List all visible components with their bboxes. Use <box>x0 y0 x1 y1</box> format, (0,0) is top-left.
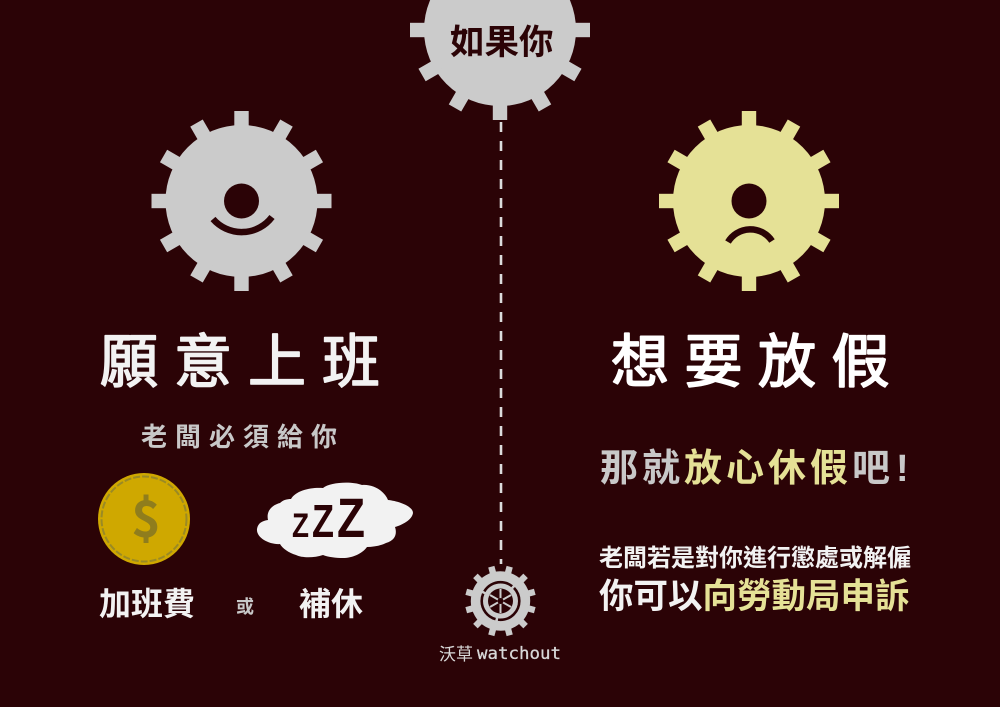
text: 那就放心休假吧: 那就放心休假吧 <box>600 448 894 490</box>
icon: sleeping cloud <box>257 483 413 558</box>
logo: watchout gear <box>458 558 543 644</box>
logo text: 沃草 watchout: 沃草 <box>439 645 473 664</box>
icon: sleeping cloud: Z <box>337 486 365 549</box>
heading: 想要放假: 想要放假 <box>611 330 905 395</box>
icon: sleeping cloud: Z <box>312 495 334 547</box>
top gear: 如果你: 如果你 <box>450 24 554 62</box>
subheading: 老闆必須給你: 老闆必須給你 <box>141 422 345 452</box>
icon: sad gear <box>659 111 839 291</box>
icon: gold coin: $ <box>131 480 161 552</box>
dashed connector line <box>500 122 502 564</box>
icon: gold coin <box>98 473 190 565</box>
icon: sleeping cloud: Z <box>292 507 309 545</box>
text: 老闆若是對你進行懲處或解僱: 老闆若是對你進行懲處或解僱 <box>599 545 911 572</box>
text: watchout <box>477 644 561 664</box>
label: 補休: 補休 <box>299 586 363 622</box>
top gear: 如果你 <box>410 0 590 120</box>
heading: 願意上班: 願意上班 <box>100 330 396 395</box>
icon: smiling gear <box>152 111 332 291</box>
text: 那就放心休假吧: ! <box>896 448 913 490</box>
label: 加班費: 加班費 <box>99 586 195 622</box>
text: 你可以向勞動局申訴: 你可以向勞動局申訴 <box>599 578 910 616</box>
label: 或: 或 <box>236 596 254 617</box>
